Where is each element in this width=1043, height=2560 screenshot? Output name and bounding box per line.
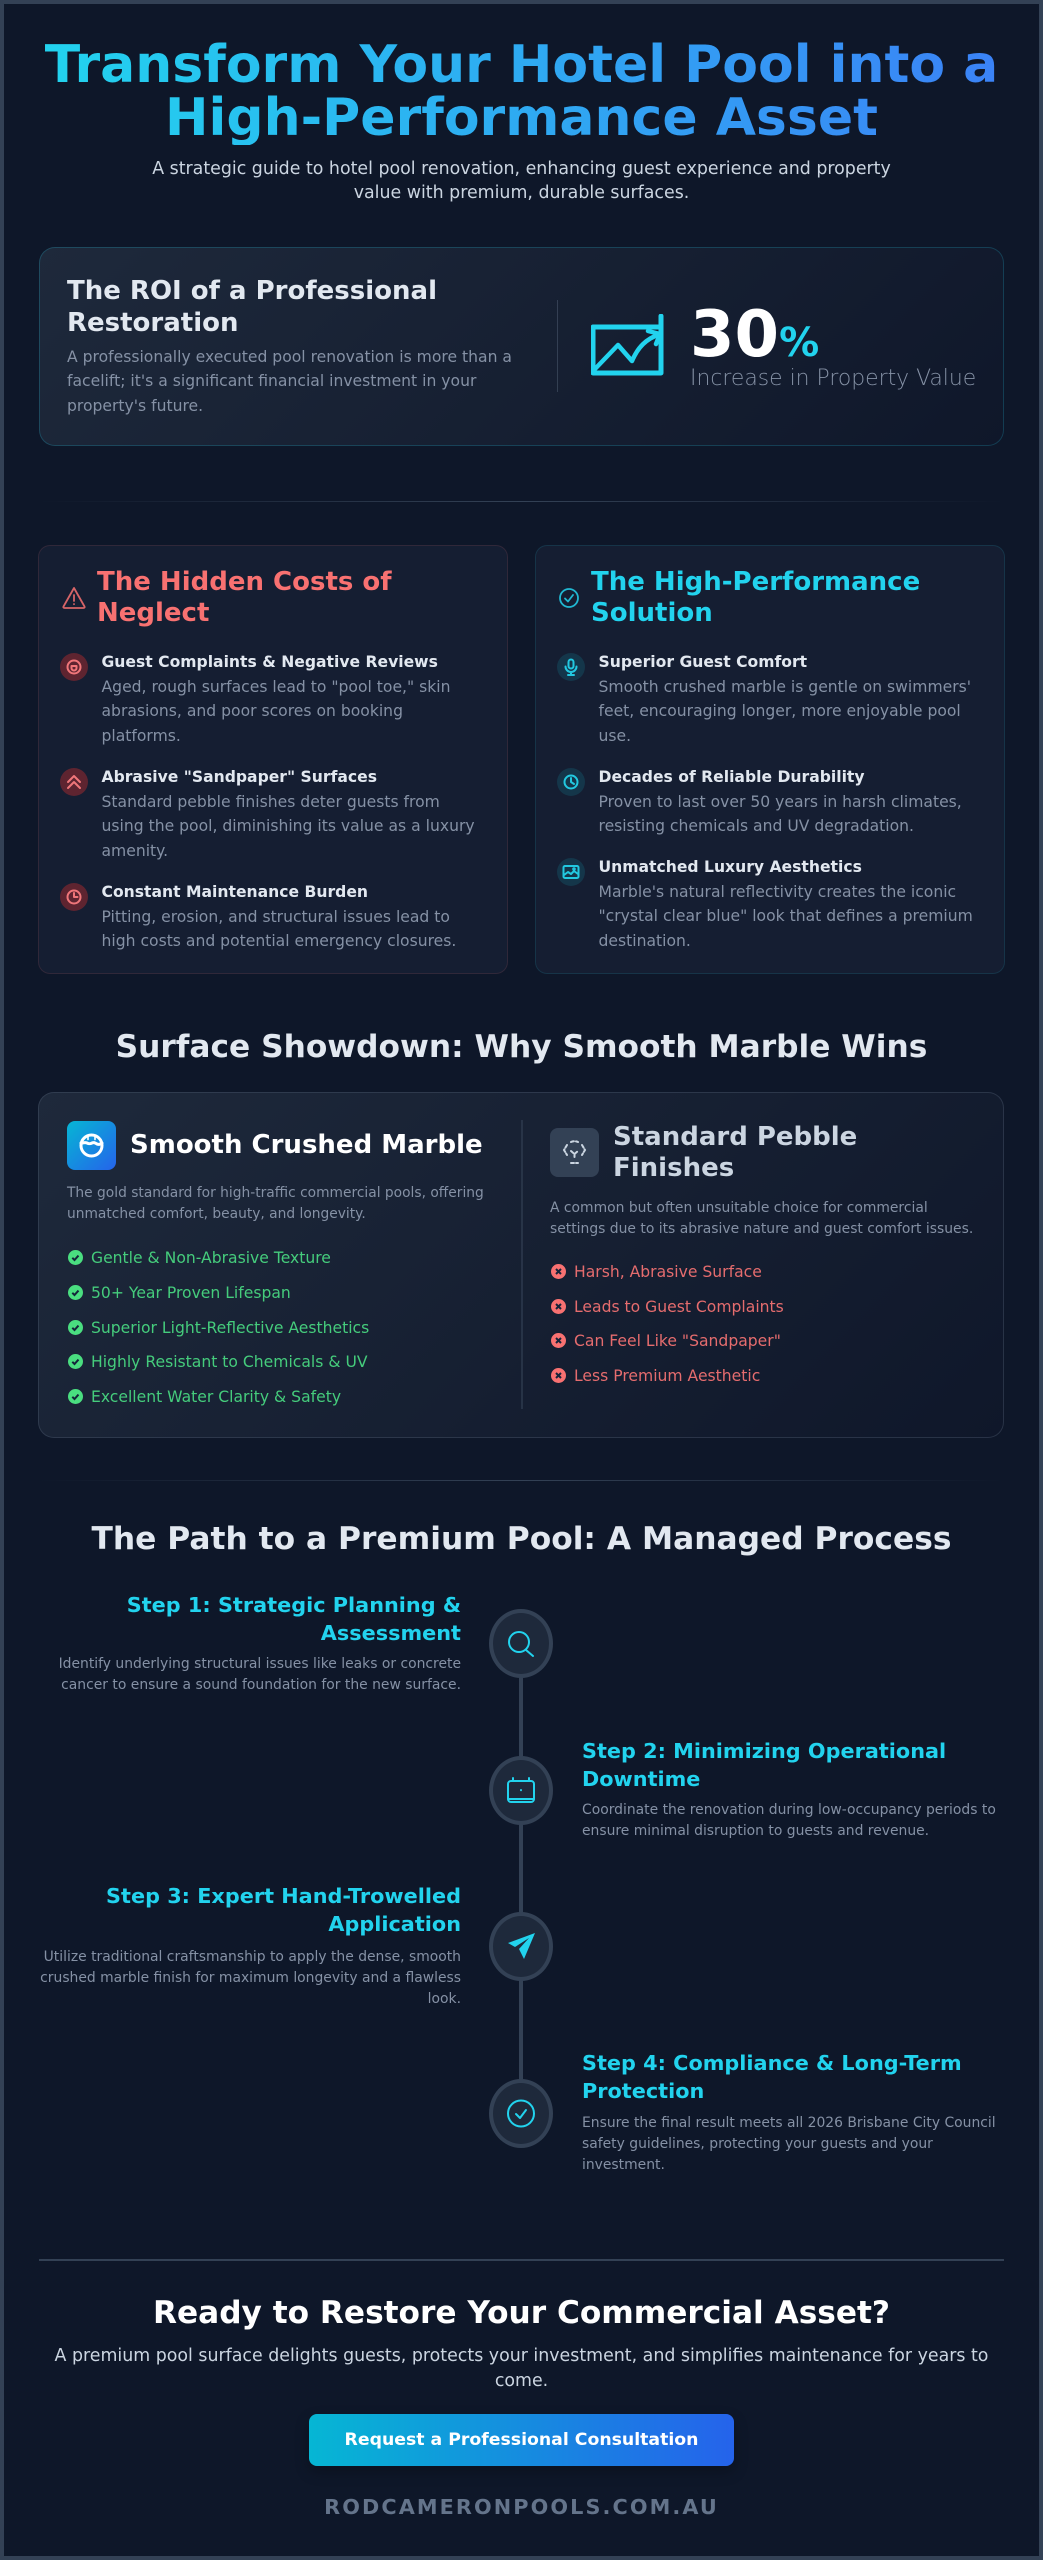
description: settings due to its abrasive nature and guest comfort issues. (550, 1221, 973, 1237)
benefit 2: 50+ Year Proven Lifespan (91, 1284, 291, 1302)
item text: high costs and potential emergency closures. (102, 932, 456, 950)
item text: Marble's natural reflectivity creates the iconic (598, 883, 956, 901)
description: A common but often unsuitable choice for commercial (550, 1200, 928, 1216)
panel: ROI (39, 247, 1004, 446)
item: sandpaper (60, 768, 475, 860)
item text: use. (598, 727, 631, 745)
item text (102, 678, 451, 745)
item title: Guest Complaints & Negative Reviews (102, 653, 438, 671)
heading: smooth marble: Smooth Crushed Marble (130, 1130, 483, 1160)
ROI description (67, 348, 512, 415)
description: unmatched comfort, beauty, and longevity. (67, 1206, 366, 1222)
icon: picture (557, 858, 585, 886)
item text (102, 908, 456, 950)
item text: Pitting, erosion, and structural issues lead to (102, 908, 450, 926)
item text: Proven to last over 50 years in harsh climates, (598, 793, 962, 811)
step 3 title: Step 3: Expert Hand-Trowelled (106, 1884, 461, 1908)
step 1 text: cancer to ensure a sound foundation for the new surface. (61, 1677, 461, 1693)
item title: Abrasive "Sandpaper" Surfaces (102, 768, 377, 786)
button: Request a Professional Consultation (345, 2430, 698, 2450)
heading: standard pebble: Finishes (613, 1153, 734, 1183)
heading: surface showdown: Surface Showdown: Why Smooth Marble Wins (116, 1029, 927, 1065)
item text: "crystal clear blue" look that defines a premium (598, 907, 973, 925)
timeline (40, 1593, 996, 2173)
ROI heading: Restoration (67, 308, 239, 338)
icon: marble (67, 1121, 116, 1170)
step 1 title: Assessment (321, 1620, 461, 1644)
website: RODCAMERONPOOLS.COM.AU (324, 2495, 719, 2519)
icon: rising chart (591, 314, 664, 376)
panel: solution (535, 545, 1005, 974)
icon: warning (62, 587, 86, 609)
benefit 3: Superior Light-Reflective Aesthetics (91, 1319, 369, 1337)
panel: hidden costs (38, 545, 508, 974)
icon: face (60, 653, 88, 681)
icon: clock (60, 883, 88, 911)
step 3 text: crushed marble finish for maximum longevity and a flawless (40, 1970, 461, 1986)
subtitle: value with premium, durable surfaces. (354, 183, 689, 203)
icon: microphone (557, 653, 585, 681)
step 2 text: ensure minimal disruption to guests and revenue. (582, 1823, 929, 1839)
button (309, 2414, 734, 2466)
item text: platforms. (102, 727, 181, 745)
subtitle: A strategic guide to hotel pool renovation, enhancing guest experience and property (152, 159, 891, 179)
heading: process: The Path to a Premium Pool: A Managed Process (92, 1521, 951, 1557)
step 4 title (582, 2050, 962, 2105)
drawback 4: Less Premium Aesthetic (574, 1367, 760, 1385)
heading: hidden costs: The Hidden Costs of (97, 567, 392, 597)
step 3 text: look. (428, 1991, 461, 2007)
benefit list (68, 1249, 369, 1406)
panel: comparison (38, 1092, 1004, 1438)
benefit 4: Highly Resistant to Chemicals & UV (91, 1353, 368, 1371)
icon: pebble (550, 1128, 599, 1177)
drawback 2: Leads to Guest Complaints (574, 1298, 784, 1316)
drawback 1: Harsh, Abrasive Surface (574, 1263, 762, 1281)
subtitle (152, 159, 891, 203)
stat label: Increase in Property Value (690, 366, 976, 391)
call to action heading: Ready to Restore Your Commercial Asset? (153, 2295, 890, 2331)
title: High-Performance Asset (165, 88, 878, 148)
icon: clock (557, 768, 585, 796)
title (40, 39, 1003, 145)
step 2 (489, 1738, 1003, 1838)
step 2 node (489, 1756, 553, 1825)
item title: Constant Maintenance Burden (102, 883, 368, 901)
item text: abrasions, and poor scores on booking (102, 702, 403, 720)
step 1 title: Step 1: Strategic Planning & (127, 1593, 461, 1617)
step 1 text (59, 1654, 461, 1696)
item title: Unmatched Luxury Aesthetics (598, 858, 862, 876)
step 3 (39, 1883, 553, 2013)
ROI heading: The ROI of a Professional (67, 276, 437, 306)
heading: solution: Solution (591, 598, 713, 628)
description (550, 1200, 973, 1237)
step 2 text (582, 1800, 996, 1842)
item title: Decades of Reliable Durability (598, 768, 865, 786)
step 2 text: Coordinate the renovation during low-occupancy periods to (582, 1802, 996, 1818)
item: guest complaints (60, 653, 451, 745)
step 3 title (106, 1883, 461, 1938)
benefit 5: Excellent Water Clarity & Safety (91, 1388, 341, 1406)
call to action text: come. (495, 2371, 548, 2391)
step 2 title (582, 1738, 946, 1793)
step 1 text: Identify underlying structural issues like leaks or concrete (59, 1656, 461, 1672)
heading: solution (591, 567, 920, 628)
heading: standard pebble (613, 1122, 857, 1183)
step 2 title: Step 2: Minimizing Operational (582, 1739, 946, 1763)
step 1 node (489, 1609, 553, 1678)
item text: resisting chemicals and UV degradation. (598, 817, 914, 835)
step 4 node (489, 2079, 553, 2148)
heading: standard pebble: Standard Pebble (613, 1122, 857, 1152)
item text: amenity. (102, 842, 168, 860)
heading: hidden costs (97, 567, 392, 628)
step 4 text: Ensure the final result meets all 2026 Brisbane City Council (582, 2115, 996, 2131)
step 3 node (489, 1912, 553, 1981)
heading: hidden costs: Neglect (97, 598, 209, 628)
benefit 1: Gentle & Non-Abrasive Texture (91, 1249, 331, 1267)
step 4 text: safety guidelines, protecting your guests and your (582, 2136, 933, 2152)
ROI heading (67, 276, 437, 338)
item: maintenance (60, 883, 456, 950)
item: durability (557, 768, 962, 835)
item: aesthetics (557, 858, 973, 950)
call to action text: A premium pool surface delights guests, protects your investment, and simplifies maintenance for years to (55, 2346, 988, 2366)
item text (102, 793, 475, 860)
ROI description: A professionally executed pool renovation is more than a (67, 348, 512, 366)
step 2 title: Downtime (582, 1766, 700, 1790)
icon: check circle (559, 588, 579, 608)
step 3 text (40, 1947, 461, 2009)
item text (598, 793, 962, 835)
item text: feet, encouraging longer, more enjoyable pool (598, 702, 961, 720)
step 1 title (127, 1593, 461, 1644)
step 4 title: Protection (582, 2078, 704, 2102)
item text: Aged, rough surfaces lead to "pool toe," skin (102, 678, 451, 696)
heading: solution: The High-Performance (591, 567, 920, 597)
description (66, 1185, 484, 1222)
step 3 title: Application (328, 1912, 461, 1936)
drawback list (551, 1263, 784, 1385)
item title: Superior Guest Comfort (598, 653, 807, 671)
column: smooth marble (66, 1121, 484, 1406)
step 3 text: Utilize traditional craftsmanship to apply the dense, smooth (44, 1949, 461, 1965)
item text: using the pool, diminishing its value as a luxury (102, 817, 475, 835)
icon: chevrons (60, 768, 88, 796)
ROI description: property's future. (67, 397, 203, 415)
drawback 3: Can Feel Like "Sandpaper" (574, 1332, 781, 1350)
item text (598, 883, 973, 950)
title: Transform Your Hotel Pool into a (45, 35, 998, 95)
description: The gold standard for high-traffic commercial pools, offering (67, 1185, 484, 1201)
step 4 title: Step 4: Compliance & Long-Term (582, 2051, 962, 2075)
stat: 30 percent: 30% (690, 298, 819, 372)
item: comfort (557, 653, 971, 745)
item text: Standard pebble finishes deter guests from (102, 793, 440, 811)
item text: Smooth crushed marble is gentle on swimmers' (598, 678, 971, 696)
column: standard pebble (550, 1122, 973, 1385)
ROI description: facelift; it's a significant financial investment in your (67, 372, 476, 390)
item text: destination. (598, 932, 691, 950)
item text (598, 678, 971, 745)
call to action text (0, 2344, 1043, 2394)
step 1 (59, 1593, 553, 1693)
step 4 text: investment. (582, 2157, 665, 2173)
step 4 (489, 2050, 1003, 2180)
step 4 text (582, 2113, 996, 2175)
